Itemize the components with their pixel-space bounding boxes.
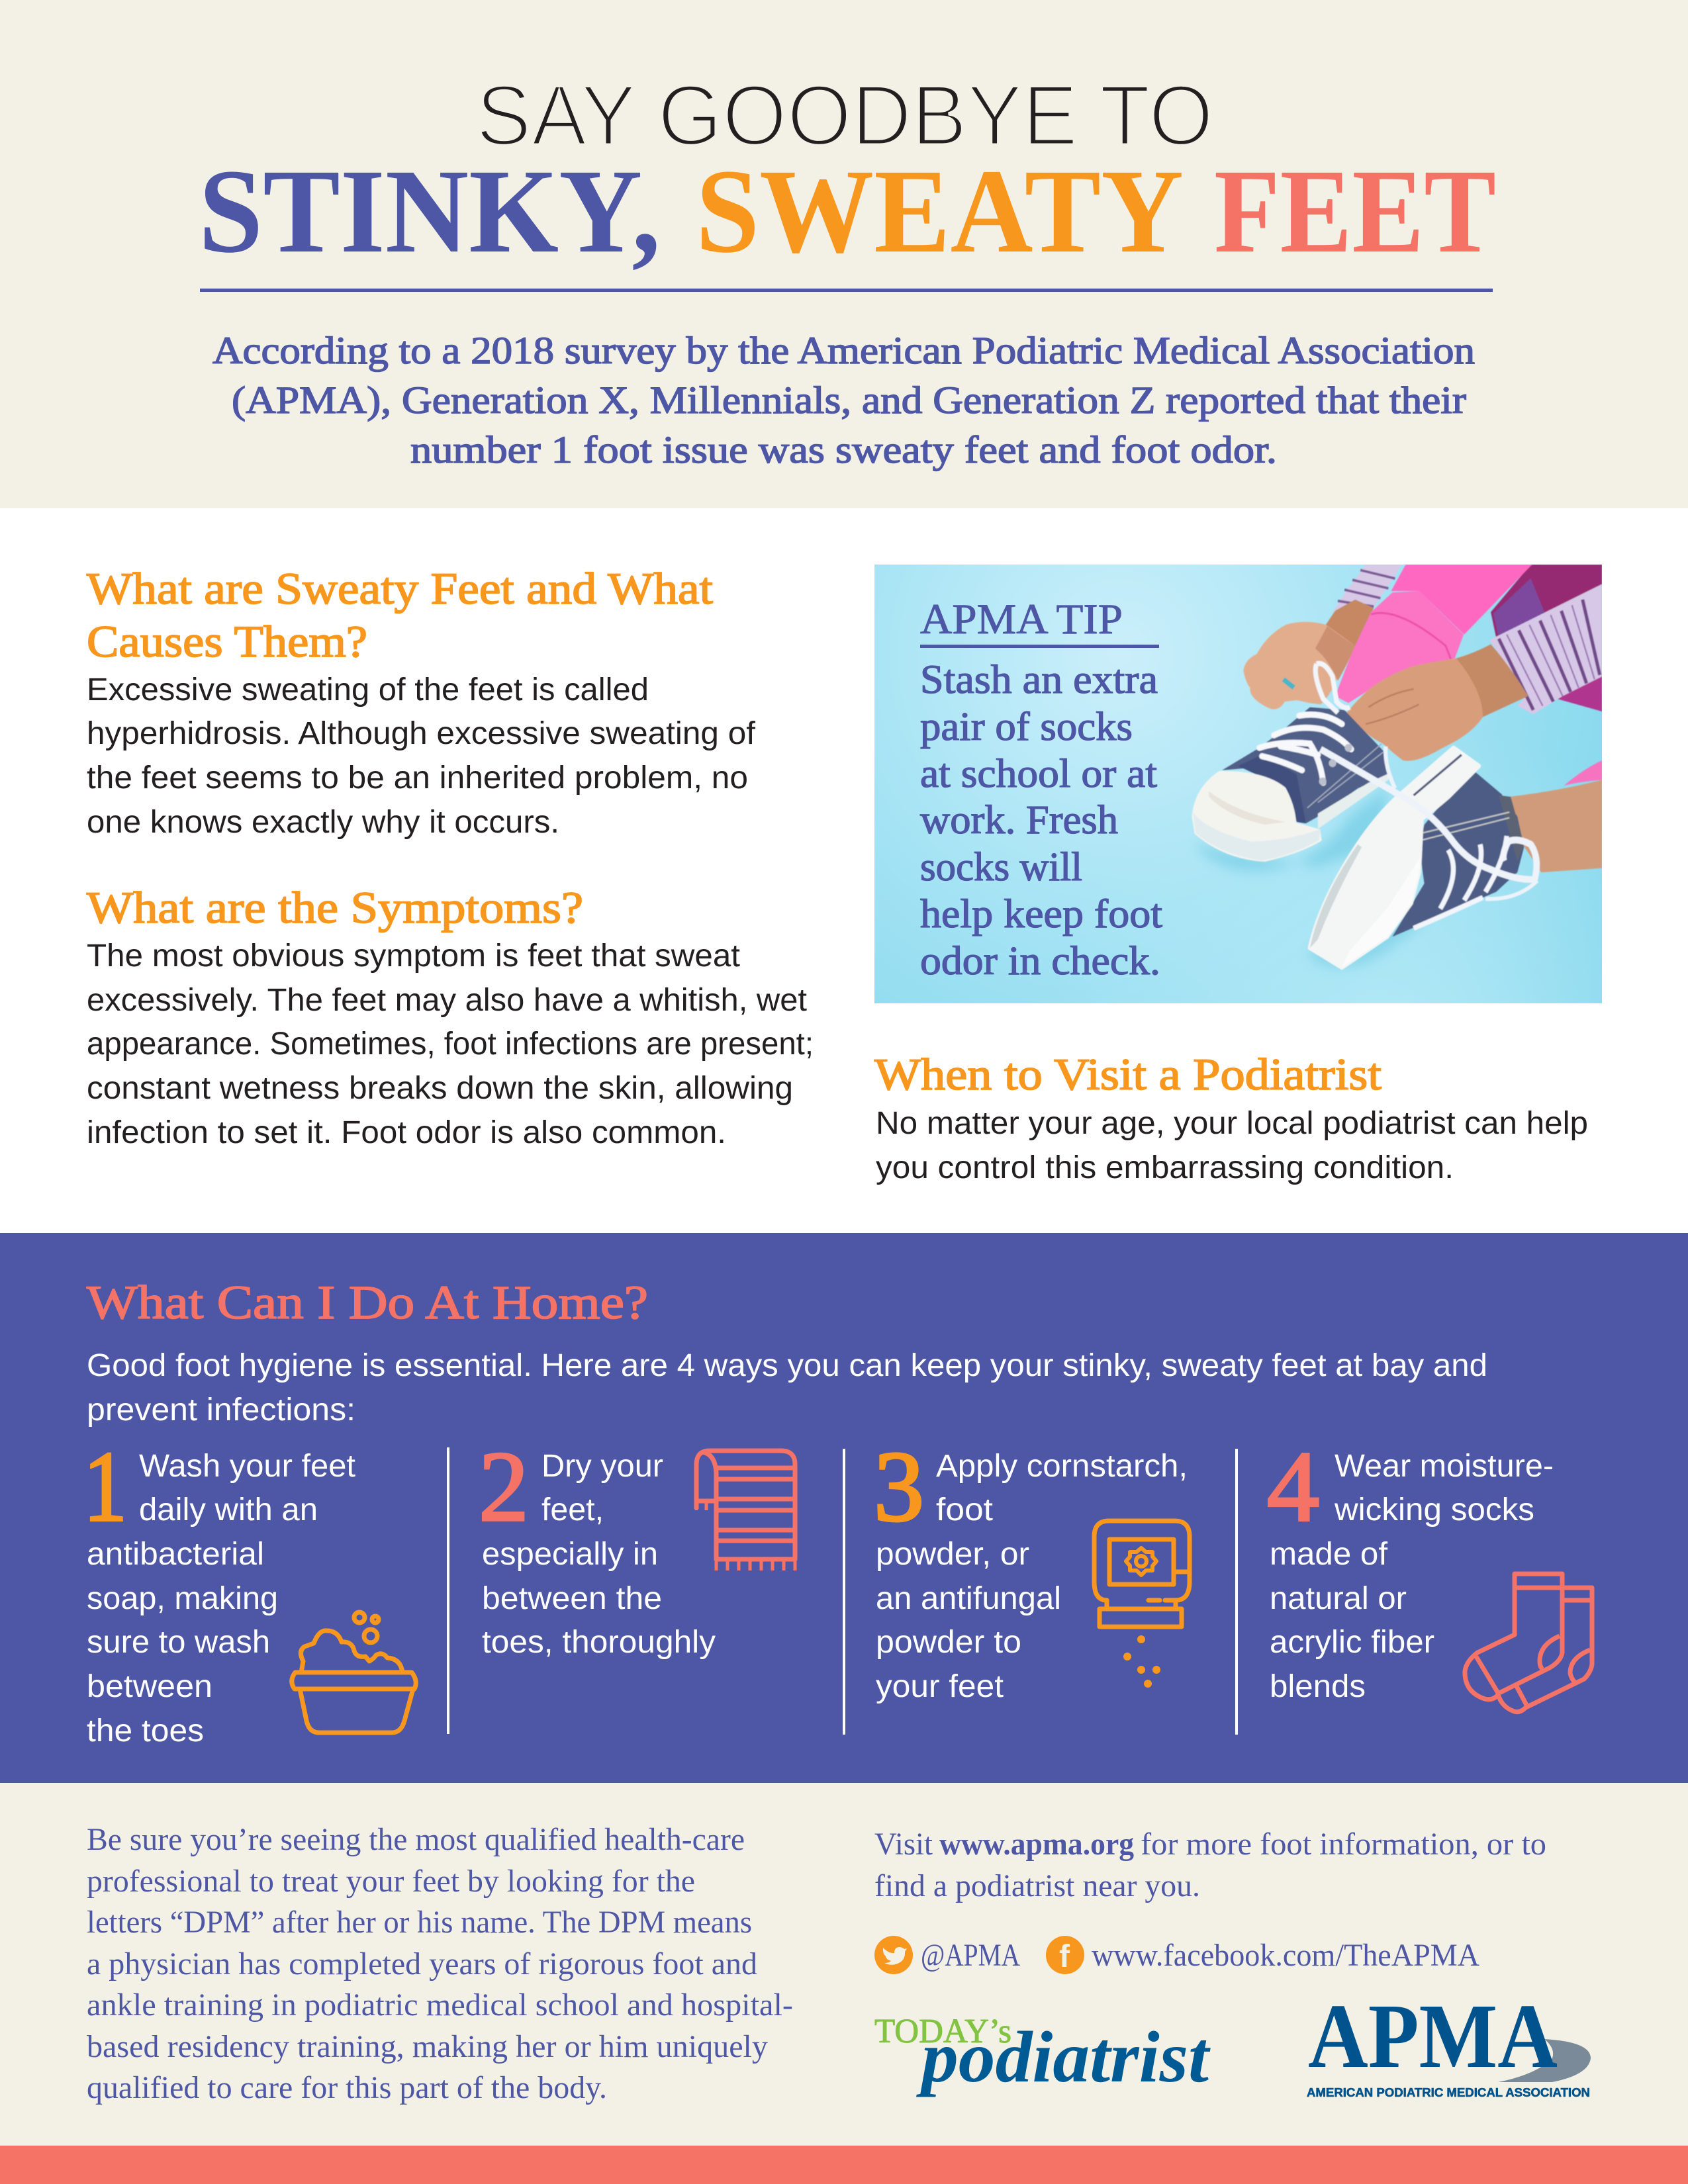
panel: what can I do at home bbox=[0, 1233, 1688, 1783]
step 2: feet, bbox=[541, 1492, 604, 1527]
text block: visit apma bbox=[874, 1827, 1546, 1903]
title: stinky, sweaty feet: STINKY, bbox=[199, 145, 661, 278]
icon: pair of socks bbox=[1465, 1574, 1592, 1712]
facebook url: www.facebook.com/TheAPMA bbox=[1092, 1938, 1479, 1973]
step 3: powder to bbox=[876, 1625, 1021, 1660]
text block: DPM qualifications: letters “DPM” after her or his name. The DPM means bbox=[87, 1905, 752, 1940]
text block: visit apma: Visit bbox=[874, 1827, 933, 1862]
icon: wash basin with foam bbox=[292, 1612, 416, 1733]
step 4: acrylic fiber bbox=[1270, 1625, 1434, 1660]
tip text: pair of socks bbox=[920, 705, 1133, 749]
step 4 bbox=[1267, 1431, 1592, 1712]
text block: what are sweaty feet bbox=[87, 563, 756, 840]
step 3: Apply cornstarch, bbox=[936, 1449, 1188, 1484]
icon: facebook: f bbox=[1059, 1939, 1070, 1974]
step 4: made of bbox=[1270, 1537, 1388, 1572]
step 1: sure to wash bbox=[87, 1625, 270, 1660]
text block: visit apma: for more foot information, or to bbox=[1141, 1827, 1546, 1862]
text block: what are sweaty feet: hyperhidrosis. Although excessive sweating of bbox=[87, 716, 756, 751]
text block: symptoms: appearance. Sometimes, foot infections are present; bbox=[87, 1026, 814, 1062]
step 4: wicking socks bbox=[1334, 1492, 1534, 1527]
text block: what are sweaty feet: the feet seems to be an inherited problem, no bbox=[87, 760, 748, 796]
title: stinky, sweaty feet: FEET bbox=[1214, 145, 1496, 278]
tip text: socks will bbox=[920, 845, 1082, 889]
step 2: toes, thoroughly bbox=[482, 1625, 716, 1660]
text block: what are sweaty feet: Causes Them? bbox=[87, 616, 367, 666]
logo: apma: APMA bbox=[1308, 1985, 1558, 2087]
logo: today's podiatrist: podiatrist bbox=[916, 2017, 1211, 2097]
icon: powder bottle bbox=[1094, 1521, 1190, 1688]
step 3: 3 bbox=[874, 1431, 924, 1542]
text block: symptoms: constant wetness breaks down the skin, allowing bbox=[87, 1071, 793, 1106]
intro paragraph: number 1 foot issue was sweaty feet and foot odor. bbox=[410, 428, 1277, 471]
step 2: 2 bbox=[479, 1431, 529, 1542]
logo: apma: AMERICAN PODIATRIC MEDICAL ASSOCIATION bbox=[1307, 2086, 1590, 2099]
step 4: 4 bbox=[1267, 1431, 1319, 1542]
step 4: natural or bbox=[1270, 1581, 1407, 1616]
title: say goodbye to: SAY GOODBYE TO bbox=[476, 67, 1213, 163]
text block: when to visit: you control this embarrassing condition. bbox=[876, 1150, 1454, 1185]
text block: what are sweaty feet: What are Sweaty Feet and What bbox=[87, 563, 713, 614]
section intro bbox=[87, 1348, 1487, 1428]
step 2: especially in bbox=[482, 1537, 658, 1572]
step 1: Wash your feet bbox=[139, 1449, 355, 1484]
step 1: soap, making bbox=[87, 1581, 278, 1616]
step 3: foot bbox=[936, 1492, 993, 1527]
text block: symptoms: excessively. The feet may also have a whitish, wet bbox=[87, 983, 807, 1018]
text block: symptoms: What are the Symptoms? bbox=[87, 882, 583, 933]
intro paragraph: (APMA), Generation X, Millennials, and Generation Z reported that their bbox=[232, 379, 1466, 422]
step 1: between bbox=[87, 1669, 212, 1704]
text block: what are sweaty feet: Excessive sweating of the feet is called bbox=[87, 672, 649, 707]
step 4: Wear moisture- bbox=[1335, 1449, 1554, 1484]
step 3: your feet bbox=[876, 1669, 1004, 1704]
step 1: daily with an bbox=[139, 1492, 318, 1527]
tip text: at school or at bbox=[920, 752, 1157, 796]
photo: child tying sneakers bbox=[874, 565, 1602, 1003]
text block: DPM qualifications: based residency training, making her or him uniquely bbox=[87, 2029, 768, 2064]
tip text: Stash an extra bbox=[920, 658, 1158, 702]
step 2: between the bbox=[482, 1581, 662, 1616]
panel: header bbox=[0, 0, 1688, 508]
text block: symptoms: infection to set it. Foot odor is also common. bbox=[87, 1115, 726, 1150]
text block: DPM qualifications: qualified to care for this part of the body. bbox=[87, 2070, 607, 2105]
step 1: antibacterial bbox=[87, 1537, 264, 1572]
title: stinky, sweaty feet: SWEATY bbox=[696, 145, 1184, 278]
step 2: Dry your bbox=[541, 1449, 663, 1484]
panel: apma tip with photo bbox=[874, 565, 1602, 1003]
text block: when to visit bbox=[874, 1049, 1588, 1185]
text block: visit apma: www.apma.org bbox=[939, 1827, 1134, 1862]
text block: when to visit: When to Visit a Podiatrist bbox=[874, 1049, 1382, 1099]
step 3 bbox=[874, 1431, 1190, 1704]
section intro: Good foot hygiene is essential. Here are 4 ways you can keep your stinky, sweaty feet at bay and bbox=[87, 1348, 1487, 1383]
text block: visit apma: find a podiatrist near you. bbox=[874, 1868, 1200, 1903]
text block: DPM qualifications bbox=[87, 1822, 793, 2105]
text block: symptoms bbox=[87, 882, 814, 1150]
text block: symptoms: The most obvious symptom is feet that sweat bbox=[87, 938, 740, 974]
step 1 bbox=[83, 1431, 416, 1749]
logo: today's podiatrist: TODAY’s bbox=[874, 2013, 1011, 2050]
text block: DPM qualifications: professional to treat your feet by looking for the bbox=[87, 1864, 695, 1899]
tip heading: APMA TIP bbox=[920, 596, 1123, 643]
step 1: the toes bbox=[87, 1713, 204, 1749]
text block: DPM qualifications: a physician has completed years of rigorous foot and bbox=[87, 1946, 757, 1981]
section heading: What Can I Do At Home? bbox=[87, 1276, 648, 1329]
tip text: odor in check. bbox=[920, 939, 1160, 983]
tip text bbox=[920, 658, 1162, 983]
icon: facebook bbox=[1046, 1936, 1084, 1974]
tip text: work. Fresh bbox=[920, 798, 1118, 842]
step 3: powder, or bbox=[876, 1537, 1029, 1572]
title: stinky, sweaty feet bbox=[199, 145, 1496, 278]
text block: when to visit: No matter your age, your local podiatrist can help bbox=[876, 1106, 1588, 1141]
step 4: blends bbox=[1270, 1669, 1366, 1704]
step 3: an antifungal bbox=[876, 1581, 1061, 1616]
step 1: 1 bbox=[83, 1431, 127, 1542]
icon: twitter bbox=[874, 1936, 913, 1974]
panel: footer bbox=[0, 1783, 1688, 2146]
intro paragraph bbox=[212, 329, 1475, 471]
section intro: prevent infections: bbox=[87, 1392, 355, 1428]
twitter handle: @APMA bbox=[921, 1938, 1020, 1973]
tip text: help keep foot bbox=[920, 892, 1162, 936]
footer bar bbox=[0, 2146, 1688, 2184]
text block: what are sweaty feet: one knows exactly why it occurs. bbox=[87, 805, 559, 840]
text block: DPM qualifications: ankle training in podiatric medical school and hospital- bbox=[87, 1987, 793, 2023]
text block: DPM qualifications: Be sure you’re seeing the most qualified health-care bbox=[87, 1822, 745, 1857]
icon: towel bbox=[696, 1451, 795, 1570]
step 2 bbox=[479, 1431, 795, 1660]
intro paragraph: According to a 2018 survey by the American Podiatric Medical Association bbox=[212, 329, 1475, 372]
